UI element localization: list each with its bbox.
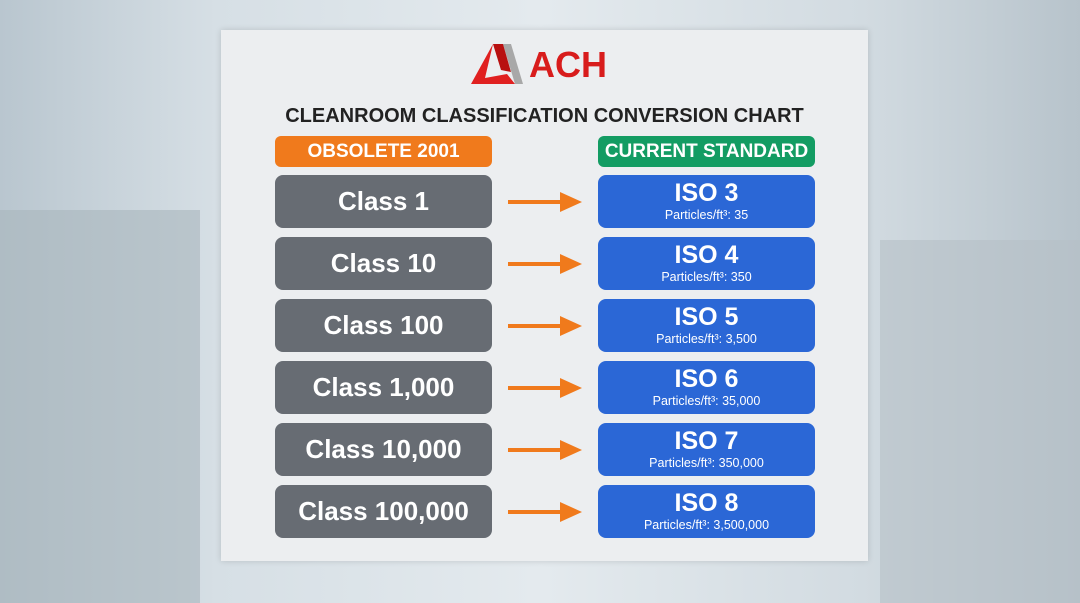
heading: current: [598, 136, 815, 167]
row 3 class: [275, 299, 492, 352]
row 6 iso: [598, 485, 815, 538]
icon: logo triangle: [471, 44, 523, 84]
logo: [471, 44, 607, 85]
row 1 class: Class 1: [338, 186, 429, 216]
row 3 iso: Particles/ft³: 3,500: [656, 332, 757, 346]
row 1 iso: [598, 175, 815, 228]
panel: chart card: [221, 30, 868, 561]
row 2 iso: [598, 237, 815, 290]
heading: obsolete: [275, 136, 492, 167]
row 5 iso: ISO 7: [675, 427, 738, 455]
row 5 class: Class 10,000: [305, 434, 462, 464]
row 1 class: [275, 175, 492, 228]
arrow 3: [508, 316, 582, 336]
arrow 2: [508, 254, 582, 274]
arrow 5: [508, 440, 582, 460]
row 1 iso: Particles/ft³: 35: [665, 208, 748, 222]
arrow 1: [508, 192, 582, 212]
row 5 iso: [598, 423, 815, 476]
row 6 class: [275, 485, 492, 538]
row 4 class: [275, 361, 492, 414]
row 3 iso: [598, 299, 815, 352]
row 3 class: Class 100: [324, 310, 443, 340]
row 6 iso: ISO 8: [675, 489, 738, 517]
row 2 class: Class 10: [331, 248, 436, 278]
row 2 iso: ISO 4: [675, 241, 738, 269]
arrow 6: [508, 502, 582, 522]
row 4 iso: [598, 361, 815, 414]
row 5 class: [275, 423, 492, 476]
row 2 class: [275, 237, 492, 290]
row 4 class: Class 1,000: [313, 372, 454, 402]
row 3 iso: ISO 5: [675, 303, 738, 331]
row 4 iso: ISO 6: [675, 365, 738, 393]
row 5 iso: Particles/ft³: 350,000: [649, 456, 764, 470]
row 4 iso: Particles/ft³: 35,000: [653, 394, 760, 408]
heading: current: CURRENT STANDARD: [605, 141, 808, 162]
logo text: ACH: [529, 44, 607, 85]
row 6 class: Class 100,000: [298, 496, 469, 526]
arrow 4: [508, 378, 582, 398]
title: CLEANROOM CLASSIFICATION CONVERSION CHART: [285, 105, 804, 127]
row 1 iso: ISO 3: [675, 179, 738, 207]
heading: obsolete: OBSOLETE 2001: [307, 141, 460, 162]
row 6 iso: Particles/ft³: 3,500,000: [644, 518, 769, 532]
row 2 iso: Particles/ft³: 350: [661, 270, 752, 284]
